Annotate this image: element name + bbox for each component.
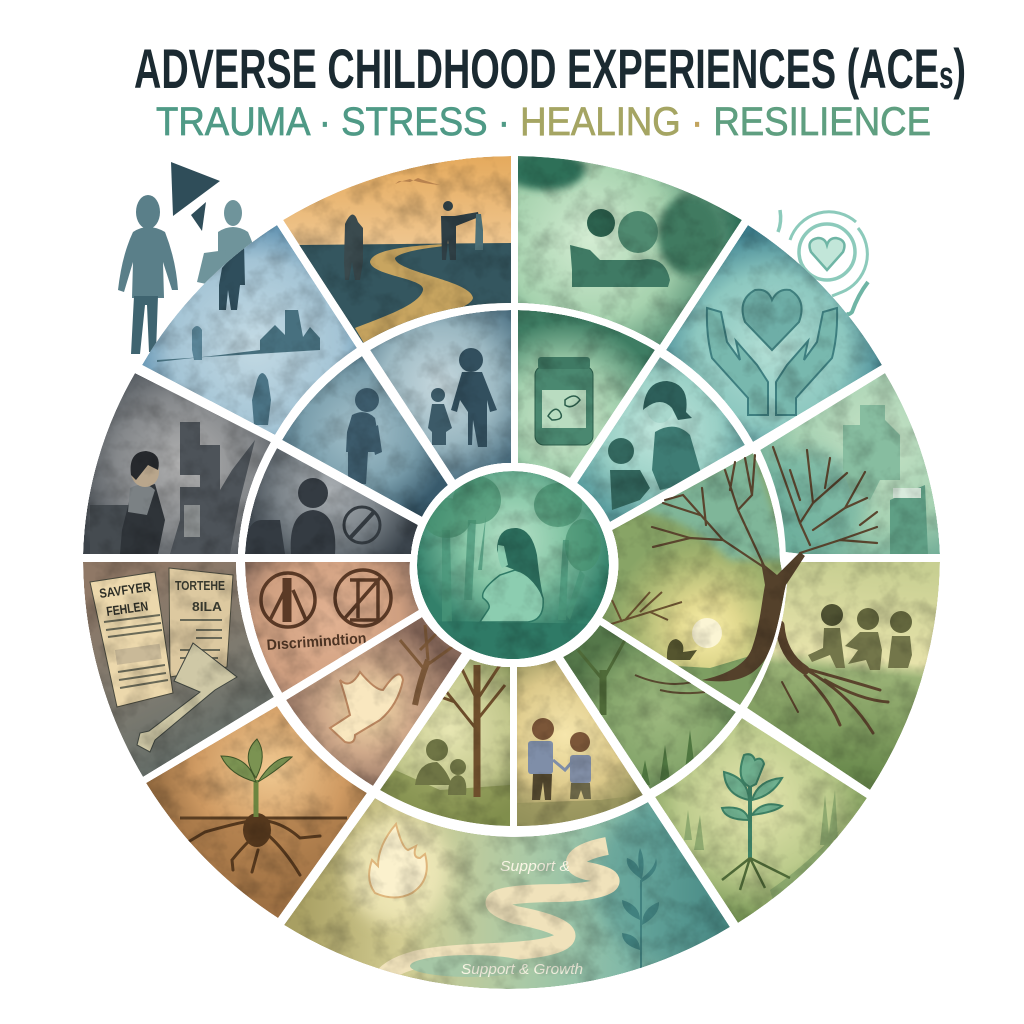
figure: adult lower half [219, 243, 245, 310]
house [890, 485, 928, 555]
figure: adult [451, 348, 497, 447]
panel: distant green building [760, 373, 940, 554]
roots of the tree [780, 625, 888, 733]
figures: two silhouettes outside the wheel [118, 162, 256, 354]
ground [417, 621, 611, 660]
grass [684, 790, 840, 899]
panel: sprout and roots [146, 706, 370, 925]
icon: prohibited box [335, 570, 391, 626]
icon: prohibited figure [261, 573, 315, 627]
figure: child walking [120, 451, 165, 554]
panel: newspapers and arrow [83, 562, 274, 777]
icon: heart [743, 290, 802, 350]
ground [517, 795, 640, 830]
lower hill [660, 650, 770, 710]
panel: embracing couple in trees [505, 150, 742, 345]
panel: adult and child in fog [370, 310, 511, 480]
panel: adult and child under tree [375, 659, 510, 828]
newspaper back: 8ILA [192, 599, 223, 614]
skyline [157, 310, 320, 362]
river [378, 846, 611, 985]
figure: seated girl [480, 528, 544, 622]
label: support and growth: Support & Growth [461, 961, 583, 978]
figure: adult with bag [197, 200, 256, 290]
figure: left adult [118, 195, 178, 354]
child left [528, 718, 554, 800]
panel: green tree and grass [563, 625, 736, 789]
newspaper front: FEHLEN [105, 598, 149, 619]
wheel of illustrated panels [83, 150, 940, 989]
plant [622, 848, 659, 970]
subtitle: TRAUMA · STRESS · HEALING · RESILIENCE [156, 100, 931, 144]
tree [578, 640, 625, 715]
winding path [355, 244, 473, 345]
glow [345, 815, 449, 925]
icon: flame [369, 824, 427, 898]
panel: silhouette with prohibition sign [245, 448, 418, 554]
newspaper back: TORTEHE [175, 578, 225, 593]
panel: mother and child [577, 357, 745, 522]
label: support upper: Support & [500, 858, 570, 875]
newspaper front: SAVFYER [98, 579, 152, 601]
figure: child [346, 388, 380, 484]
ring gap where the tree meets the outer panels [757, 450, 783, 556]
ground [375, 770, 510, 828]
figure: distant person [192, 326, 202, 360]
icon: dove [330, 672, 403, 743]
icon: heart in concentric rings [778, 210, 868, 314]
teal wash behind tree [767, 442, 874, 554]
panel: orange sky and winding path [283, 156, 511, 345]
small bare tree [608, 592, 682, 625]
figure: walking person [252, 373, 271, 425]
icon: bird [395, 178, 440, 185]
panel: jar with broken chain [518, 310, 655, 478]
couple [570, 209, 670, 287]
icon: jar [535, 357, 593, 445]
roots [188, 820, 320, 875]
icon: large triangle [171, 162, 220, 216]
panel: child facing away [282, 356, 448, 517]
figure: adult and child [441, 201, 483, 260]
panel: three children [747, 562, 940, 790]
crown branches [652, 447, 877, 568]
icon: sun [692, 618, 722, 648]
panel: hands holding heart [666, 225, 882, 442]
panel: gray city with child [83, 373, 271, 554]
upper teal wash [640, 450, 790, 560]
panel: foggy blue city [142, 225, 357, 435]
figures [415, 739, 466, 795]
fallen roots [635, 675, 705, 693]
newspaper back [169, 568, 233, 677]
panel: discrimination symbols [245, 562, 419, 693]
panel: two children holding hands [517, 660, 643, 830]
child right [553, 732, 591, 799]
figure: child [608, 438, 650, 510]
panel: dove and tree [286, 617, 462, 786]
ruined buildings [90, 422, 255, 554]
figure: reclining person [667, 639, 697, 660]
tree trunks [442, 515, 585, 622]
tree [435, 665, 505, 797]
figure: child [428, 388, 452, 445]
arrow [137, 643, 237, 752]
icon: small triangle [191, 202, 206, 231]
sapling [722, 754, 782, 860]
grass [640, 730, 695, 785]
icon: prohibition sign [344, 507, 380, 543]
label: discrimination: Dıscrimindtion [266, 630, 367, 654]
foliage [658, 195, 722, 275]
roots [722, 858, 790, 890]
trunk [702, 552, 805, 681]
figure [245, 478, 335, 554]
tree [400, 625, 455, 705]
teal lower-right wash [595, 800, 735, 960]
building silhouette [843, 405, 900, 500]
tree spanning panels [652, 447, 877, 681]
icon: cupping hands [707, 308, 837, 415]
sprout [221, 739, 292, 817]
figure: standing person [344, 214, 363, 280]
panel: sapling with roots [655, 718, 867, 925]
foliage [423, 476, 601, 571]
children [808, 604, 912, 670]
panel: tree at sunset [602, 450, 790, 710]
newspaper front [90, 572, 173, 707]
center: girl sitting among trees [417, 471, 611, 660]
panel: flame and river [284, 798, 735, 989]
figure: mother [643, 381, 703, 490]
soil [170, 818, 349, 918]
landscape [296, 243, 511, 345]
